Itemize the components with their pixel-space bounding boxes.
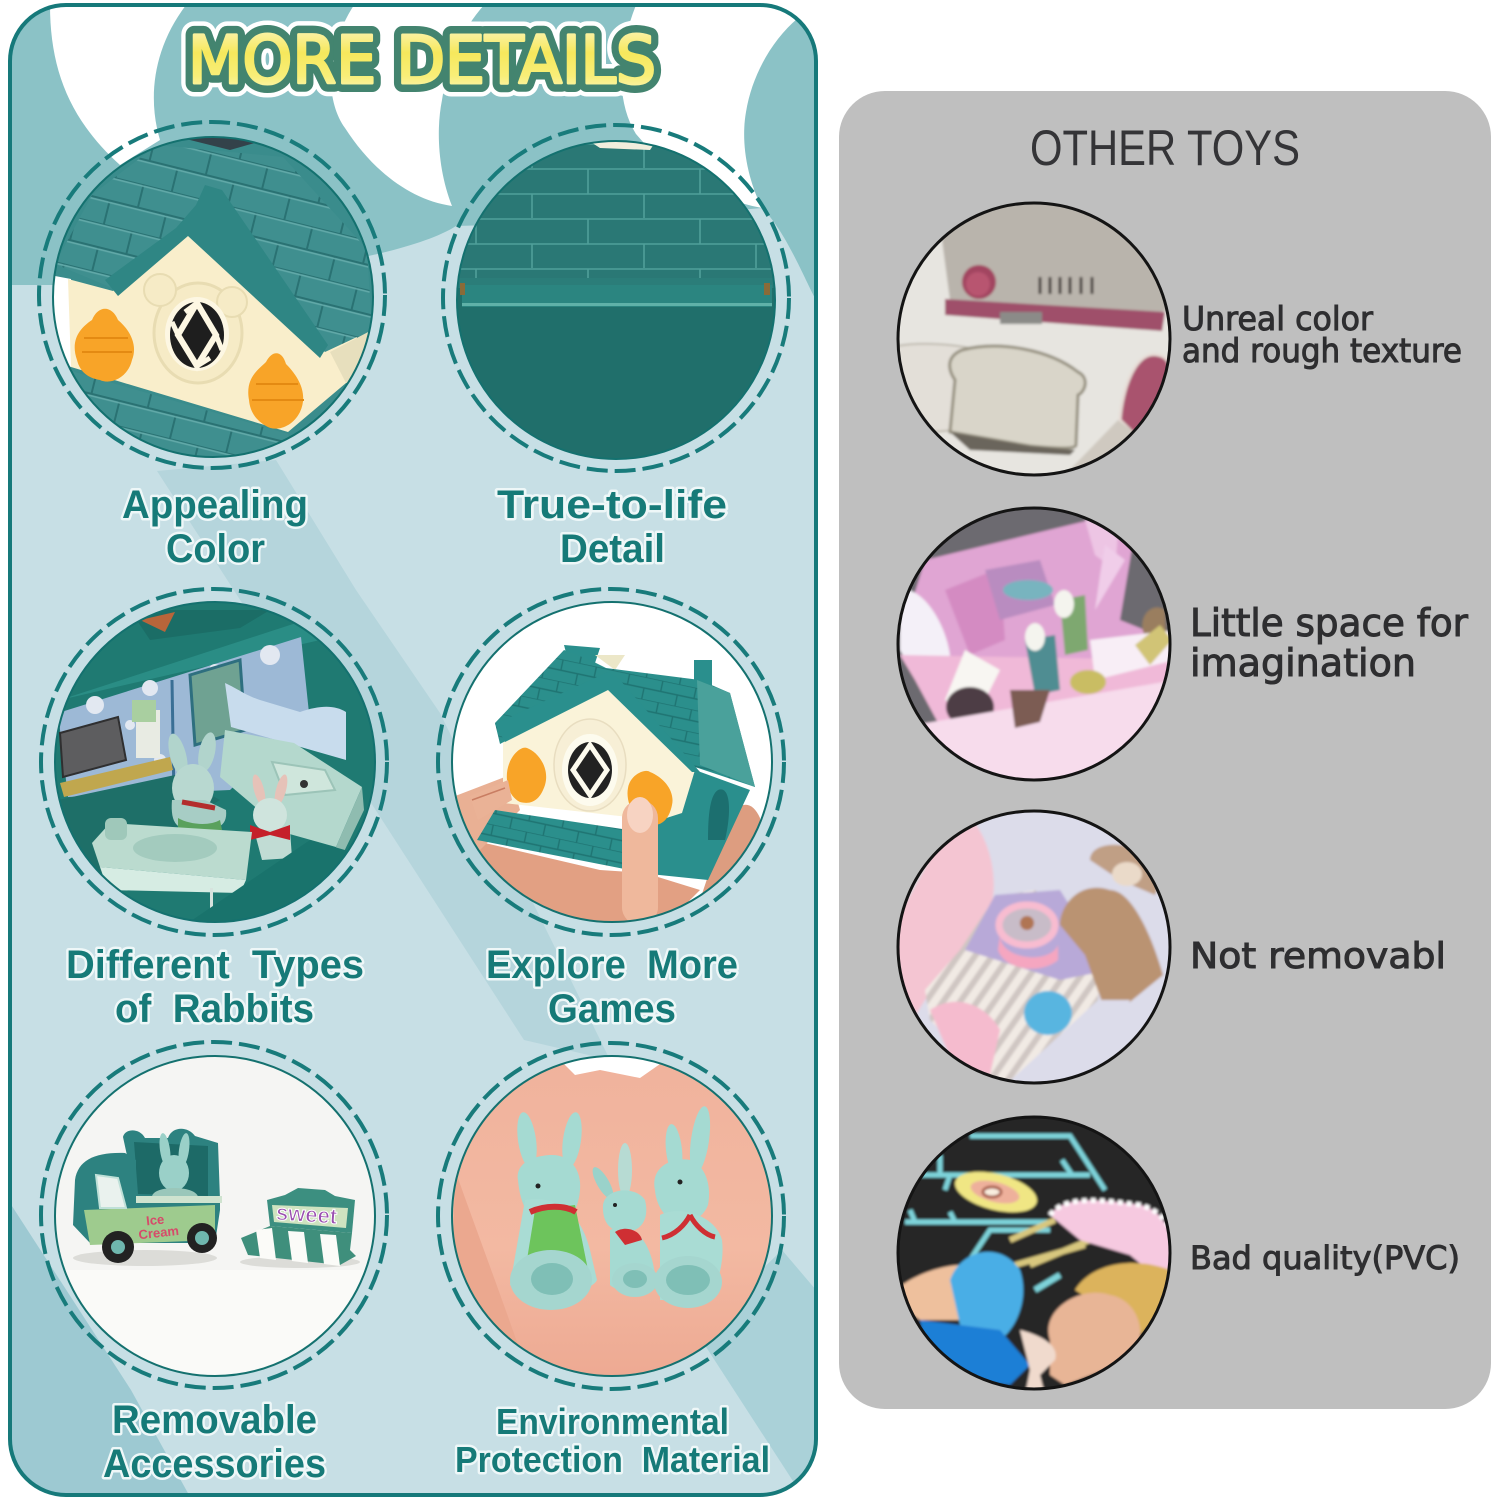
text: unreal color: [1182, 299, 1462, 370]
medal: removable accessories: sweet: [275, 1200, 339, 1229]
title: more details: MORE DETAILS: [188, 22, 656, 99]
heading: other toys: OTHER TOYS: [1030, 120, 1300, 176]
medal: removable accessories: [41, 1042, 387, 1388]
medal: different types of rabbits: [41, 589, 387, 935]
panel: more details: [10, 5, 816, 1495]
label: different types of rabbits: Different Types: [66, 943, 364, 987]
text: unreal color: Unreal color: [1182, 299, 1373, 338]
label: true-to-life detail: True-to-life: [497, 483, 727, 527]
text: not removable: Not removabl: [1190, 936, 1446, 977]
label: environmental protection material: Environmental: [496, 1401, 729, 1442]
title: more details: MORE DETAILS: [188, 22, 656, 99]
label: environmental protection material: Protection Material: [455, 1439, 770, 1480]
medal: removable accessories: Cream: [138, 1223, 180, 1242]
medal: removable accessories: Ice: [145, 1212, 165, 1228]
label: explore more games: Explore More: [486, 943, 738, 987]
label: different types of rabbits: of Rabbits: [115, 987, 314, 1031]
label: explore more games: [486, 943, 738, 1031]
label: environmental protection material: [455, 1401, 770, 1480]
label: appealing color: Appealing: [122, 483, 308, 527]
medal: environmental protection material: [438, 1043, 784, 1389]
label: different types of rabbits: [66, 943, 364, 1031]
text: unreal color: and rough texture: [1182, 331, 1462, 370]
medal: true-to-life detail: [443, 125, 789, 471]
label: removable accessories: Removable: [112, 1398, 317, 1442]
label: true-to-life detail: Detail: [560, 527, 665, 571]
label: appealing color: Color: [166, 527, 265, 571]
medal: appealing color: [39, 122, 385, 470]
label: removable accessories: Accessories: [103, 1442, 326, 1486]
label: explore more games: Games: [548, 987, 676, 1031]
text: little space: Little space for: [1190, 601, 1468, 645]
panel: other toys: [839, 91, 1491, 1409]
photo: toaster and bread: [895, 200, 1175, 480]
medal: explore more games: [438, 589, 784, 935]
text: bad quality: Bad quality(PVC): [1190, 1239, 1460, 1277]
photo: dolls on plastic sprue: [895, 1113, 1175, 1395]
label: appealing color: [122, 483, 308, 571]
label: true-to-life detail: [497, 483, 727, 571]
text: little space: imagination: [1190, 641, 1416, 685]
title: more details: MORE DETAILS: [188, 22, 656, 99]
text: little space: [1190, 601, 1468, 685]
photo: pink camera craft: [895, 808, 1175, 1090]
photo: pink play case: [895, 505, 1175, 790]
label: removable accessories: [103, 1398, 326, 1486]
